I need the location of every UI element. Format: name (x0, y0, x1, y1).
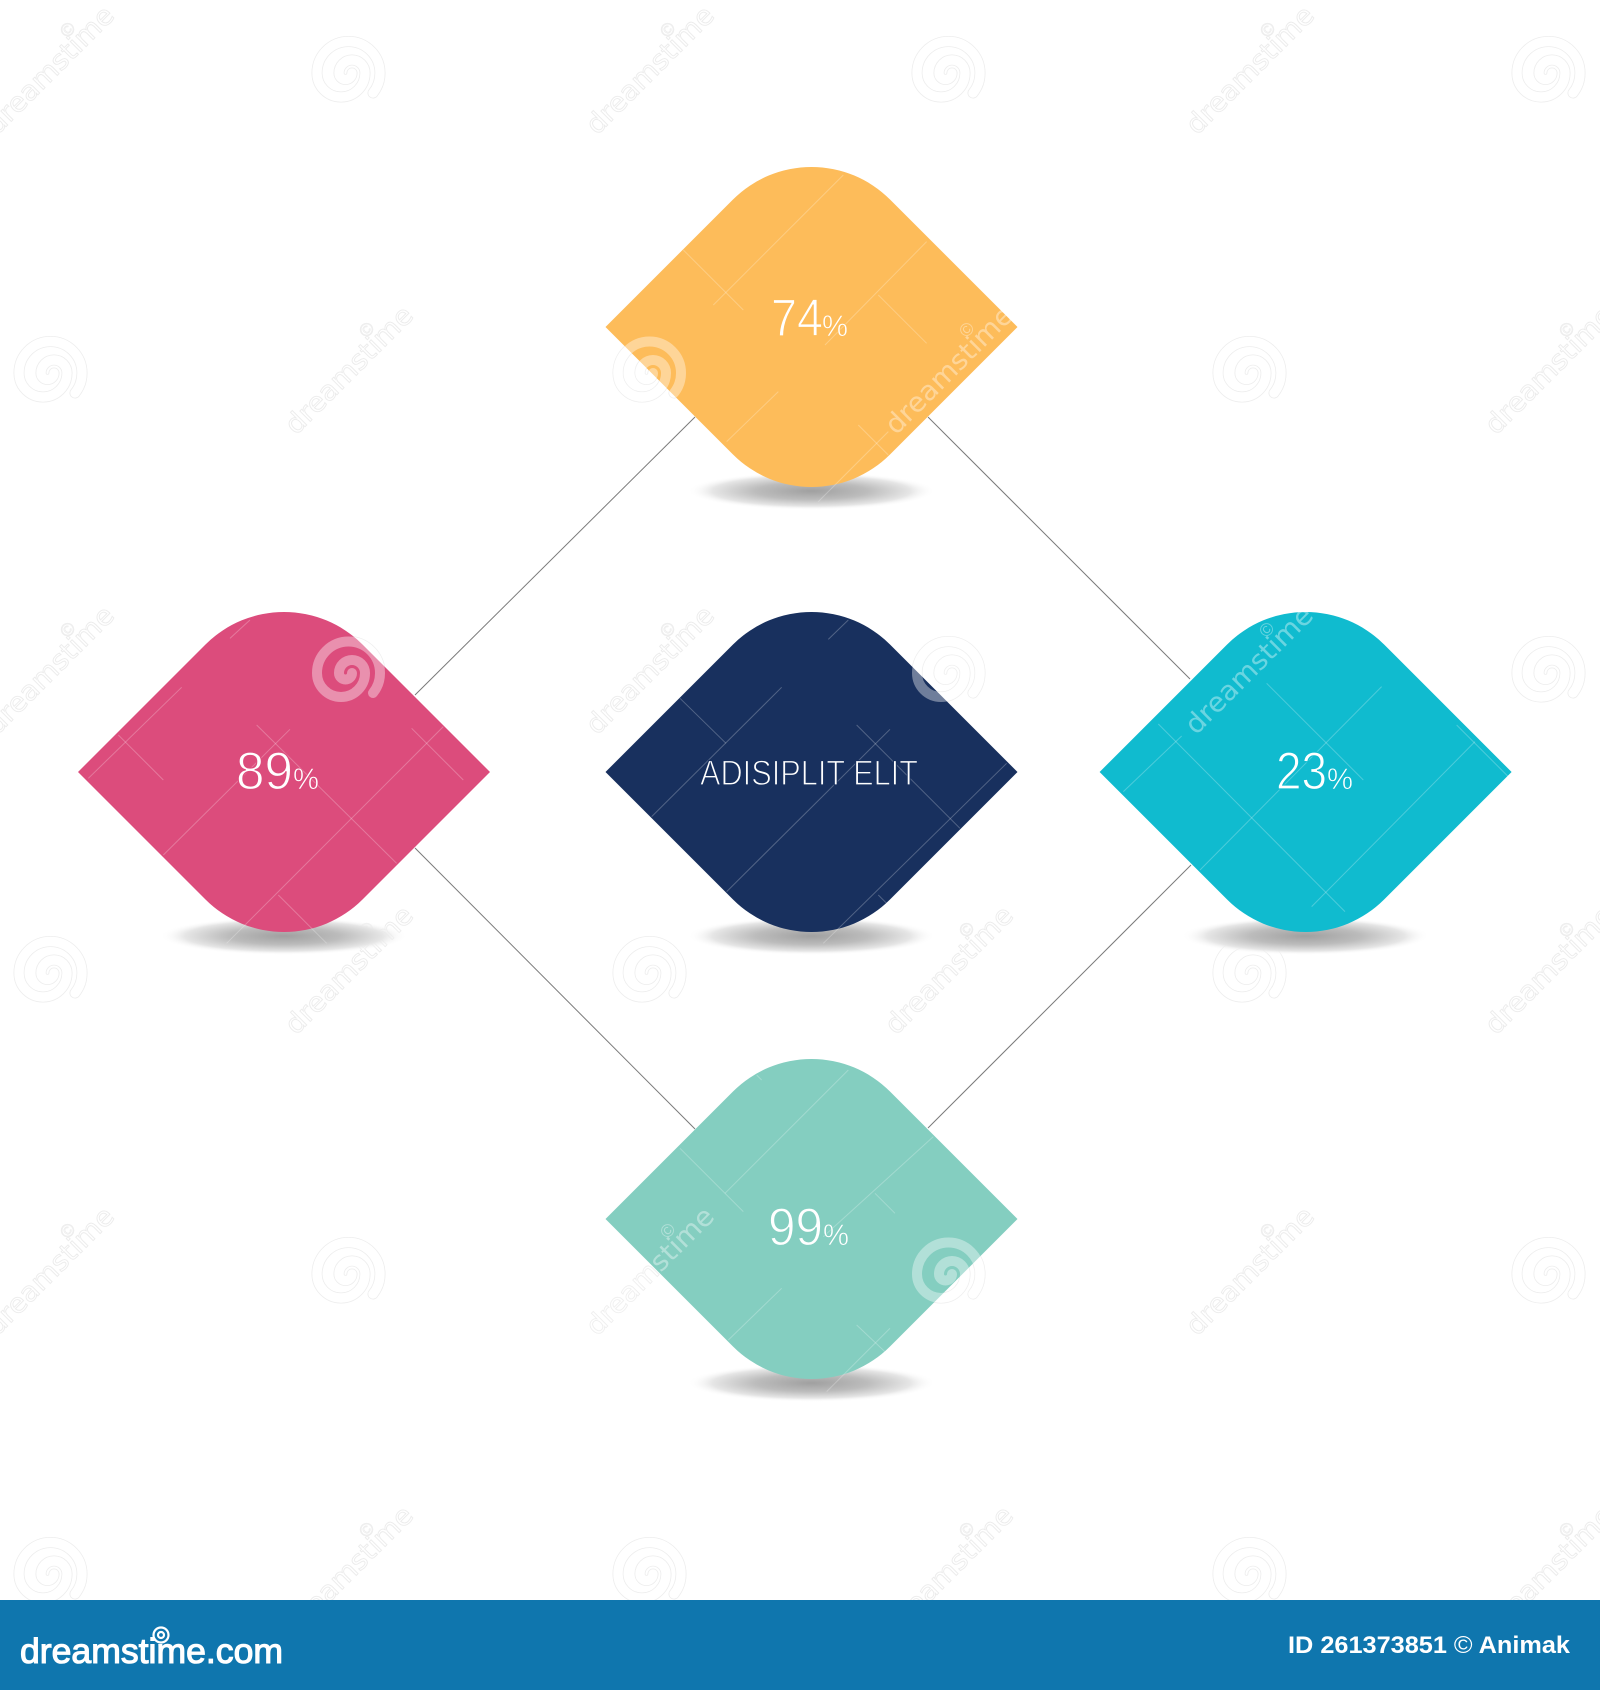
watermark text: © (656, 1219, 679, 1242)
watermark text: © (656, 618, 679, 641)
watermark text: dreamstime (879, 1500, 1020, 1641)
watermark text: dreamstime (279, 1500, 420, 1641)
watermark overlays on shapes: dreamstime (879, 300, 1020, 441)
watermark text: © (1555, 918, 1578, 941)
node: right teal 23% (1100, 612, 1512, 932)
watermark text: dreamstime (580, 0, 721, 141)
watermark text: © (355, 1518, 378, 1541)
node: center navy label: ADISIPLIT ELIT (700, 754, 918, 793)
watermark text: © (56, 18, 79, 41)
watermark text: dreamstime (580, 1201, 721, 1342)
watermark overlays on shapes (317, 292, 1320, 1342)
node: right teal 23%: 23 (1276, 742, 1327, 801)
watermark text: © (656, 18, 679, 41)
node: right teal 23%: % (1327, 763, 1353, 796)
watermark text: dreamstime (279, 300, 420, 441)
watermark overlays on shapes: © (656, 1219, 679, 1242)
watermark text: © (355, 318, 378, 341)
watermark overlays on shapes: dreamstime (580, 1201, 721, 1342)
node: left pink 89% (78, 612, 490, 943)
watermark text: © (1256, 1219, 1279, 1242)
watermark text: dreamstime (1180, 0, 1321, 141)
watermark text: dreamstime (580, 600, 721, 741)
watermark text: © (355, 918, 378, 941)
shape shadows (160, 472, 1430, 1402)
connector lines (415, 417, 1191, 1129)
watermark text: © (1555, 318, 1578, 341)
node: center navy label (606, 612, 1018, 943)
watermark text: © (955, 1518, 978, 1541)
node: left pink 89%: % (293, 763, 319, 796)
node: top yellow 74% (606, 167, 1018, 502)
watermark overlays on shapes: dreamstime (1179, 600, 1320, 741)
watermark text: © (1555, 1518, 1578, 1541)
watermark text: dreamstime (879, 900, 1020, 1041)
watermark overlays on shapes: © (1255, 618, 1278, 641)
node: bottom mint 99%: 99 (768, 1198, 823, 1257)
banner logo text: dreamstime.com (20, 1632, 283, 1671)
watermark text: © (1256, 18, 1279, 41)
watermark text: dreamstime (279, 900, 420, 1041)
watermark text: © (56, 618, 79, 641)
icon: logo spiral (154, 1628, 168, 1642)
node: top yellow 74%: % (822, 310, 848, 343)
watermark overlays on shapes: © (955, 318, 978, 341)
watermark text: © (56, 1219, 79, 1242)
watermark text: © (955, 918, 978, 941)
node: top yellow 74%: 74 (771, 289, 823, 348)
image credit: ID 261373851 © Animak (1288, 1632, 1571, 1659)
watermark text: dreamstime (1180, 1201, 1321, 1342)
node: bottom mint 99% (606, 1059, 1018, 1392)
node: left pink 89%: 89 (236, 742, 293, 801)
bottom banner (0, 1600, 1600, 1690)
node: bottom mint 99%: % (823, 1219, 849, 1252)
